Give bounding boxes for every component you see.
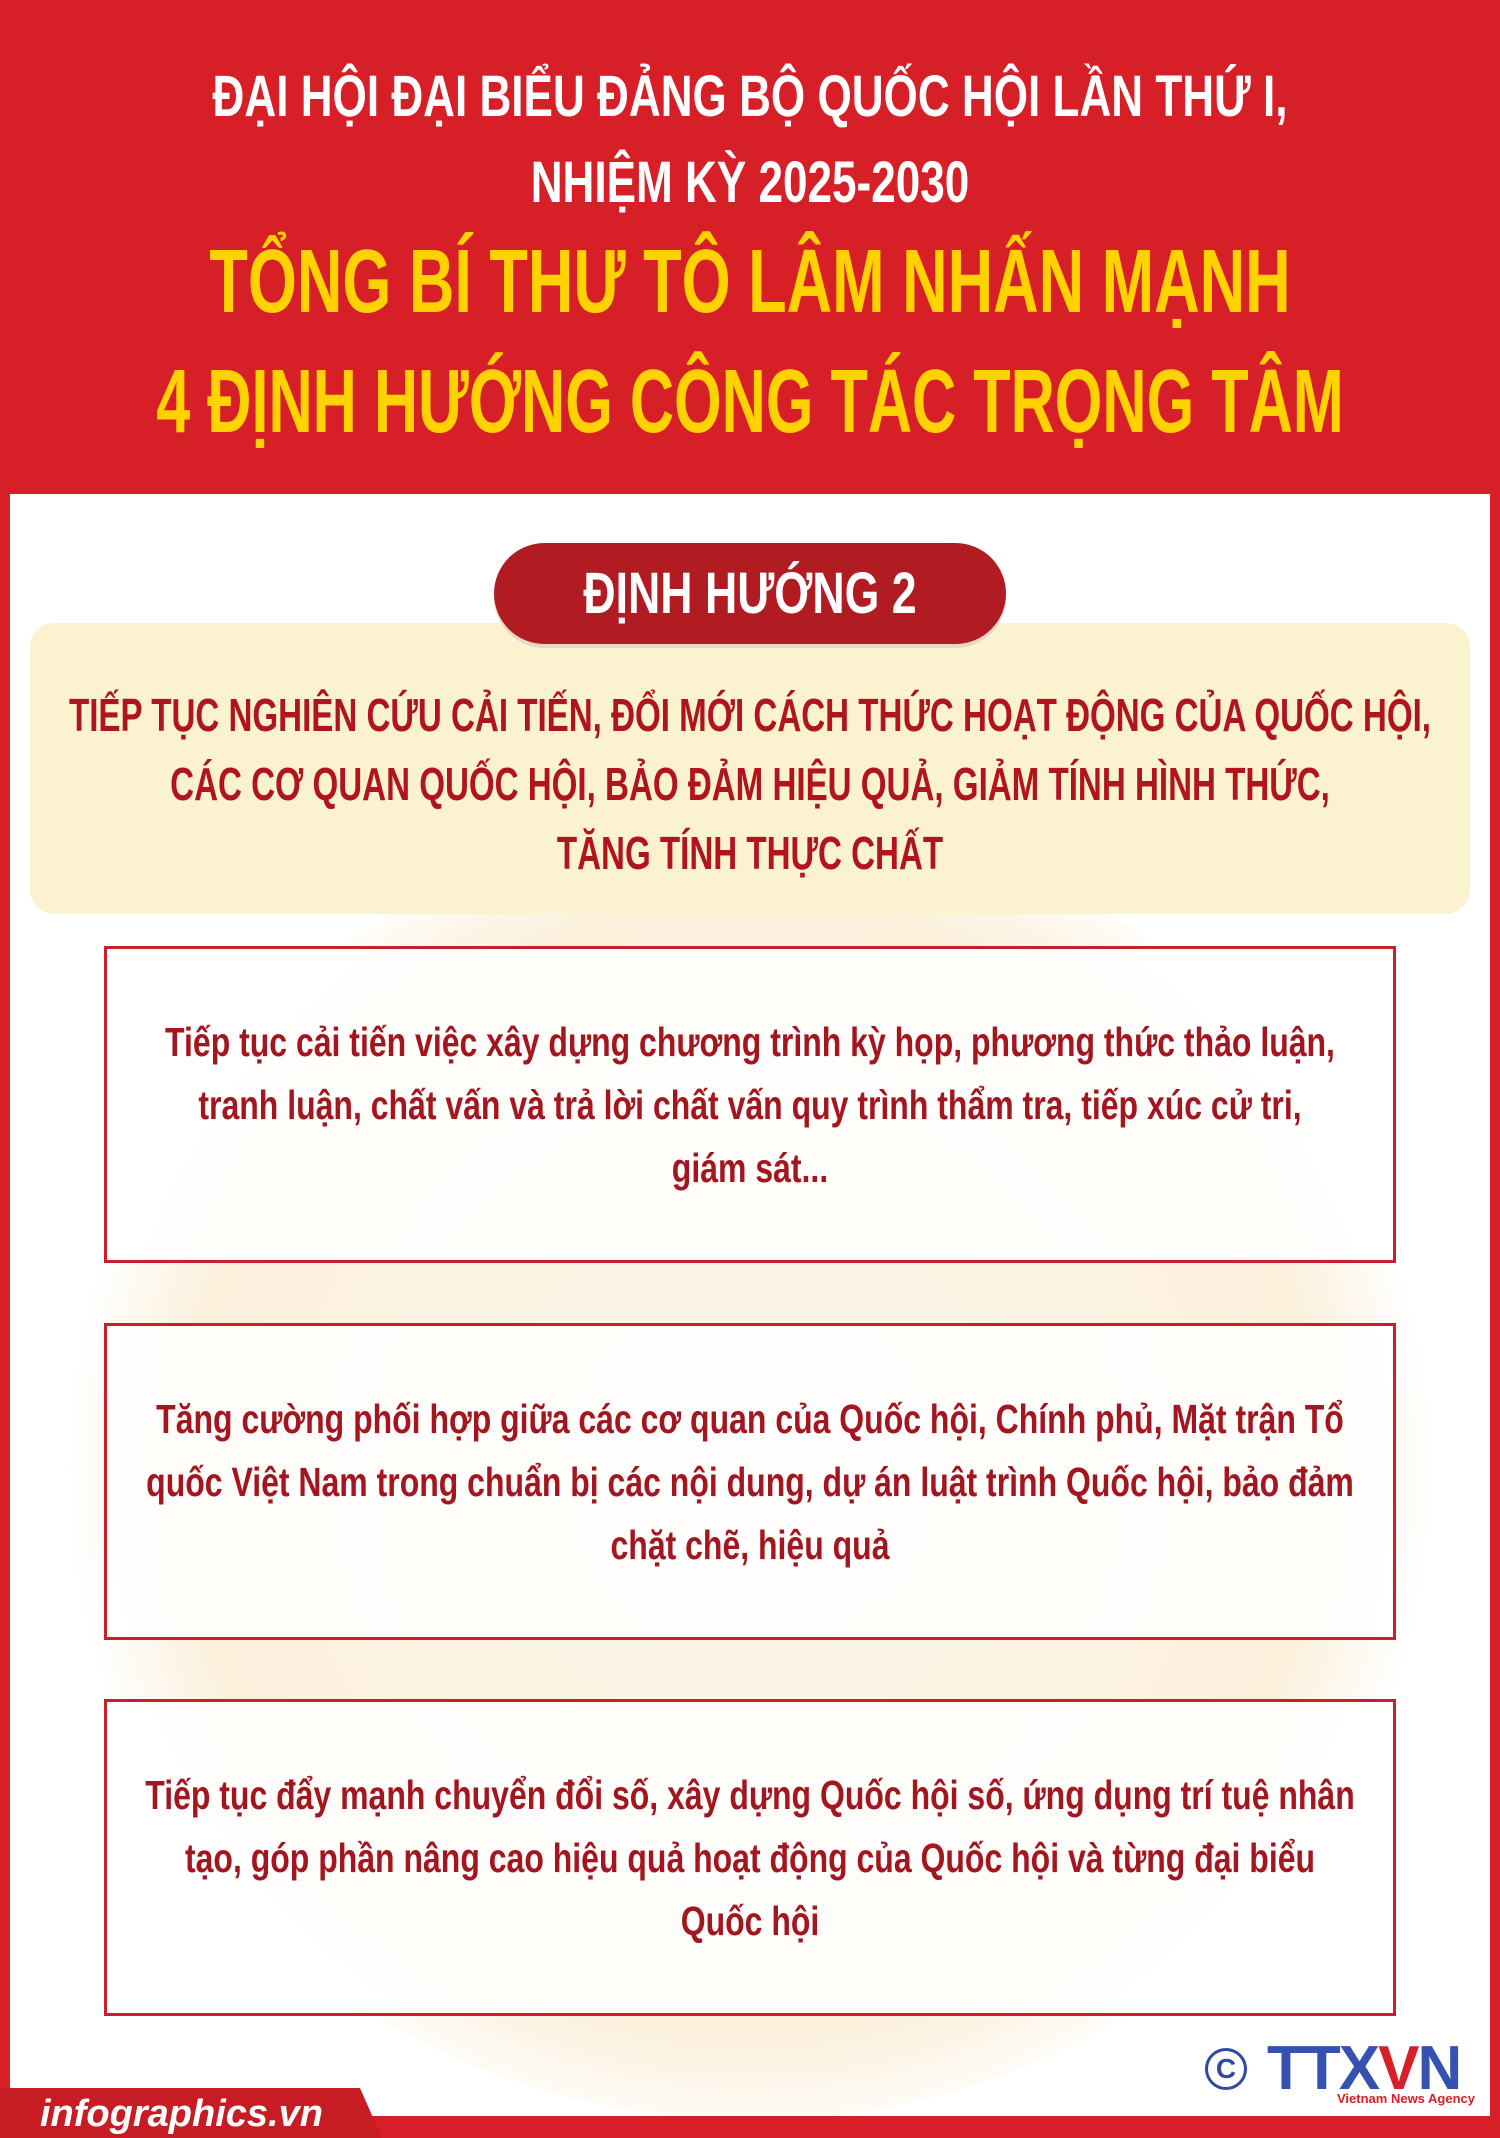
box 1: Tiếp tục cải tiến việc xây dựng chương trình kỳ họp, phương thức thảo luận, — [165, 1019, 1335, 1065]
copyright icon — [1205, 2048, 1247, 2090]
logo text: TTXVN — [1267, 2034, 1460, 2103]
side frame left — [0, 494, 10, 2138]
box 3: tạo, góp phần nâng cao hiệu quả hoạt động của Quốc hội và từng đại biểu — [185, 1835, 1315, 1881]
panel text — [69, 689, 1431, 879]
logo TTXVN — [1205, 2034, 1475, 2106]
panel text: TĂNG TÍNH THỰC CHẤT — [557, 827, 943, 879]
box 3: Tiếp tục đẩy mạnh chuyển đổi số, xây dựng Quốc hội số, ứng dụng trí tuệ nhân — [145, 1772, 1355, 1818]
header subtitle: NHIỆM KỲ 2025-2030 — [531, 150, 969, 215]
footer tab: infographics.vn — [40, 2093, 323, 2135]
box 2: Tăng cường phối hợp giữa các cơ quan của Quốc hội, Chính phủ, Mặt trận Tổ — [156, 1396, 1344, 1442]
panel text: CÁC CƠ QUAN QUỐC HỘI, BẢO ĐẢM HIỆU QUẢ, GIẢM TÍNH HÌNH THỨC, — [170, 758, 1330, 810]
box 2: quốc Việt Nam trong chuẩn bị các nội dung, dự án luật trình Quốc hội, bảo đảm — [146, 1459, 1354, 1505]
pill heading: ĐỊNH HƯỚNG 2 — [583, 561, 917, 626]
header subtitle: ĐẠI HỘI ĐẠI BIỂU ĐẢNG BỘ QUỐC HỘI LẦN THỨ I, — [213, 64, 1287, 129]
box 2: chặt chẽ, hiệu quả — [610, 1522, 890, 1568]
box 3: Quốc hội — [681, 1898, 819, 1944]
side frame right — [1490, 494, 1500, 2138]
panel text: TIẾP TỤC NGHIÊN CỨU CẢI TIẾN, ĐỔI MỚI CÁCH THỨC HOẠT ĐỘNG CỦA QUỐC HỘI, — [69, 689, 1431, 741]
header subtitle — [212, 64, 1287, 215]
header — [0, 0, 1500, 494]
logo TTXVN: Vietnam News Agency — [1337, 2091, 1475, 2106]
footer bar — [0, 2116, 1500, 2138]
box 1: tranh luận, chất vấn và trả lời chất vấn quy trình thẩm tra, tiếp xúc cử tri, — [198, 1082, 1302, 1128]
footer tab — [0, 2088, 382, 2138]
main title: 4 ĐỊNH HƯỚNG CÔNG TÁC TRỌNG TÂM — [156, 352, 1344, 452]
box 1: giám sát... — [672, 1145, 828, 1191]
main title: TỔNG BÍ THƯ TÔ LÂM NHẤN MẠNH — [209, 232, 1291, 332]
main title — [156, 231, 1344, 452]
box 3 — [104, 1699, 1396, 2016]
box 1 — [104, 946, 1396, 1263]
background seal — [60, 820, 1440, 2120]
box 2 — [104, 1323, 1396, 1640]
copyright icon: C — [1216, 2053, 1236, 2084]
beige panel — [30, 623, 1470, 914]
pill heading — [494, 543, 1006, 644]
